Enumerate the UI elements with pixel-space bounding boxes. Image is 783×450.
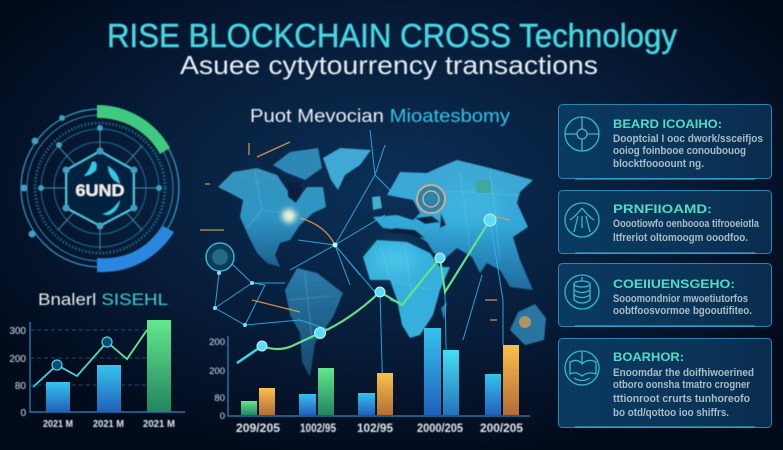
- middle chart y labels: 200: [209, 337, 225, 348]
- icon: coin stack: [565, 275, 599, 309]
- left chart x labels: 2021 M: [43, 419, 73, 430]
- map heading: Puot Mevocian Mioatesbomy: [250, 106, 510, 126]
- middle chart x labels: [236, 423, 524, 435]
- map: UK: [372, 196, 382, 210]
- card 1 text: Dooptcial I ooc dwork/ssceifjos: [613, 133, 763, 145]
- panel: card 3: [558, 264, 772, 326]
- card 4 text: [613, 367, 754, 419]
- panel: card 1: [558, 104, 772, 179]
- card 4 text: otboro oonsha tmatro crogner: [613, 379, 751, 391]
- map: Australia: [510, 304, 546, 345]
- left chart y labels: 300: [9, 326, 26, 337]
- middle chart bars: [241, 328, 519, 415]
- title: RISE BLOCKCHAIN CROSS Technology: [107, 17, 677, 54]
- map: orange routes: [200, 142, 510, 320]
- middle chart x labels: 200/205: [480, 423, 524, 435]
- middle chart x labels: 1002/95: [300, 423, 337, 435]
- middle chart x labels: 102/95: [357, 423, 394, 435]
- left chart bars: [46, 382, 70, 412]
- middle bar chart: [209, 328, 530, 435]
- left chart y labels: 80: [15, 381, 26, 392]
- map: network lines: [215, 130, 503, 400]
- card 2 text: [613, 218, 760, 244]
- middle chart axes: [228, 336, 530, 416]
- card 4 heading: BOARHOR:: [613, 350, 684, 364]
- middle chart x labels: 209/205: [236, 423, 281, 435]
- left bar chart: [9, 290, 185, 430]
- card 1 text: [613, 133, 763, 170]
- left chart x labels: 2021 M: [143, 419, 175, 430]
- world map: [218, 148, 546, 377]
- panel: card 2: [558, 190, 772, 254]
- map: Arctic islands: [273, 148, 322, 180]
- dial green arc: [97, 105, 170, 154]
- card 3 text: [613, 293, 752, 317]
- card 4 text: Enoomdar the doifhiwoerined: [613, 367, 754, 379]
- left chart trend line: [33, 330, 147, 387]
- dial: blockchain ring: [20, 105, 179, 272]
- middle chart x labels: 2000/205: [417, 423, 464, 435]
- icon: network book: [565, 351, 599, 385]
- map: land glow: [435, 185, 505, 225]
- map: Greenland: [323, 148, 371, 190]
- map: growth trend line: [237, 214, 496, 363]
- card 2 heading: PRNFIIOAMD:: [613, 202, 712, 216]
- middle chart y labels: [209, 337, 225, 422]
- card 3 heading: COEIIUENSGEHO:: [613, 277, 735, 291]
- panel: card 4: [558, 338, 772, 428]
- map: rings and nodes: [206, 180, 531, 328]
- map: Eurasia: [373, 160, 533, 290]
- middle chart y labels: 0: [220, 411, 225, 422]
- left chart y labels: [9, 326, 26, 419]
- map: Mediterranean and seas: [385, 213, 447, 266]
- dial label: 6UND: [76, 181, 124, 200]
- left chart title: Bnalerl SISEHL: [38, 290, 168, 309]
- card 4 text: tttionroot crurts tunhoreofo: [613, 393, 750, 405]
- map: borders: [247, 170, 520, 340]
- left chart axes: [30, 322, 185, 412]
- card 1 heading: BEARD ICOAIHO:: [613, 117, 722, 131]
- icon: shield: [565, 203, 599, 237]
- card 3 text: Sooomondnior mwoetiutorfos: [613, 293, 748, 305]
- map: Hudson Bay: [287, 182, 303, 203]
- icon: compass: [565, 117, 599, 151]
- dial hexagon: [66, 151, 134, 226]
- left chart x labels: 2021 M: [93, 419, 124, 430]
- card 3 text: oobtfoosvormoe bgooutifiteo.: [613, 305, 752, 317]
- left chart y labels: 0: [20, 408, 26, 419]
- card 1 text: ooiog foinbooe conoubouog: [613, 145, 746, 157]
- map: South America: [285, 268, 343, 377]
- card 2 text: ltfreriot oltomoogm ooodfoo.: [613, 232, 748, 244]
- middle chart y labels: 200: [209, 366, 225, 377]
- card 4 text: bo otd/qottoo ioo shiffrs.: [613, 407, 729, 419]
- middle chart y labels: 80: [214, 393, 225, 404]
- left chart y labels: 200: [9, 354, 26, 365]
- map: Africa: [363, 240, 450, 338]
- left chart x labels: [43, 419, 175, 430]
- subtitle: Asuee cytytourrency transactions: [180, 50, 598, 80]
- map: North America: [218, 168, 326, 267]
- dial blue arc: [97, 226, 174, 272]
- card 1 text: blocktfoooount ng.: [613, 158, 704, 170]
- map: Madagascar: [441, 302, 447, 320]
